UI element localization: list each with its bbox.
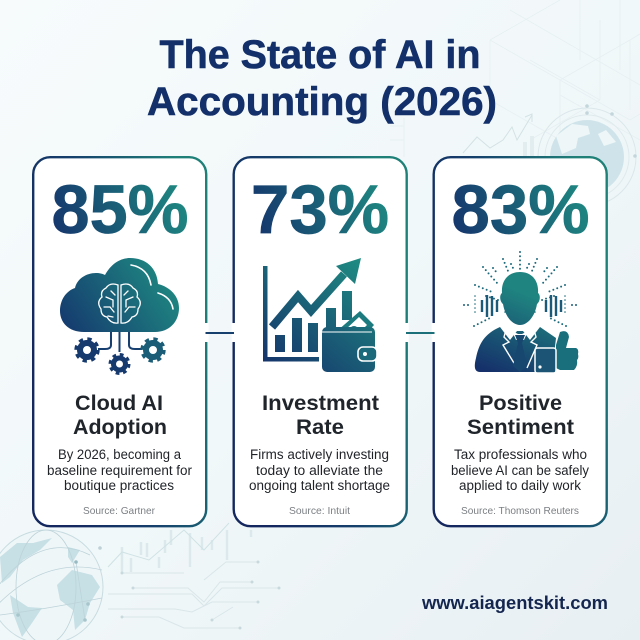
text: investment description: ongoing talent shortage — [249, 478, 390, 493]
background: line chart top right — [390, 114, 532, 157]
source: Thomson Reuters: Source: Thomson Reuters — [461, 505, 579, 517]
title: Accounting (2026) — [147, 80, 497, 124]
text: sentiment description — [451, 447, 589, 493]
panel: cloud AI adoption — [33, 157, 209, 526]
connector: cards two and three — [406, 332, 434, 334]
icon: cloud brain with gears — [60, 258, 179, 374]
background: globe bottom left — [0, 530, 103, 640]
heading: investment rate: Rate — [296, 415, 344, 439]
background: globe top right — [538, 104, 637, 206]
heading: positive sentiment: Sentiment — [467, 415, 574, 439]
background: hexagon grid top right — [490, 0, 640, 150]
background: circuit traces bottom — [108, 560, 280, 630]
text: investment description: Firms actively investing — [250, 447, 389, 462]
heading: investment rate — [262, 391, 379, 439]
background: candlestick chart bottom — [108, 523, 251, 572]
text: sentiment description: believe AI can be safely — [451, 463, 589, 478]
heading: investment rate: Investment — [262, 391, 379, 415]
text: cloud AI description: boutique practices — [64, 478, 174, 493]
footer url: www.aiagentskit.com — [421, 593, 608, 613]
connector gap: card two edges — [232, 323, 409, 342]
connector: cards one and two — [206, 332, 234, 334]
stat: 85%: 85% — [52, 171, 188, 248]
stat: 83%: 83% — [452, 171, 590, 248]
text: sentiment description: Tax professionals who — [454, 447, 587, 462]
panel: positive sentiment — [432, 157, 607, 526]
heading: cloud AI adoption — [73, 391, 167, 439]
icon: growth chart and wallet — [263, 258, 377, 372]
text: investment description — [249, 447, 390, 493]
heading: cloud AI adoption: Adoption — [73, 415, 167, 439]
text: cloud AI description: By 2026, becoming a — [58, 447, 181, 462]
icon: professional with thumbs up — [464, 252, 578, 373]
stat: 73%: 73% — [251, 171, 389, 248]
heading: positive sentiment — [467, 391, 574, 439]
text: cloud AI description — [47, 447, 192, 493]
panel: investment rate — [232, 157, 409, 526]
heading: cloud AI adoption: Cloud AI — [75, 391, 163, 415]
connector gap: card three left edge — [432, 323, 436, 342]
text: cloud AI description: baseline requirement for — [47, 463, 192, 478]
connector gap: card one right edge — [204, 323, 208, 342]
title: The State of AI in — [160, 33, 480, 77]
source: Gartner: Source: Gartner — [83, 505, 155, 517]
title — [147, 33, 497, 124]
text: sentiment description: applied to daily work — [459, 478, 581, 493]
text: investment description: today to alleviate the — [256, 463, 383, 478]
source: Intuit: Source: Intuit — [289, 505, 350, 517]
heading: positive sentiment: Positive — [479, 391, 562, 415]
